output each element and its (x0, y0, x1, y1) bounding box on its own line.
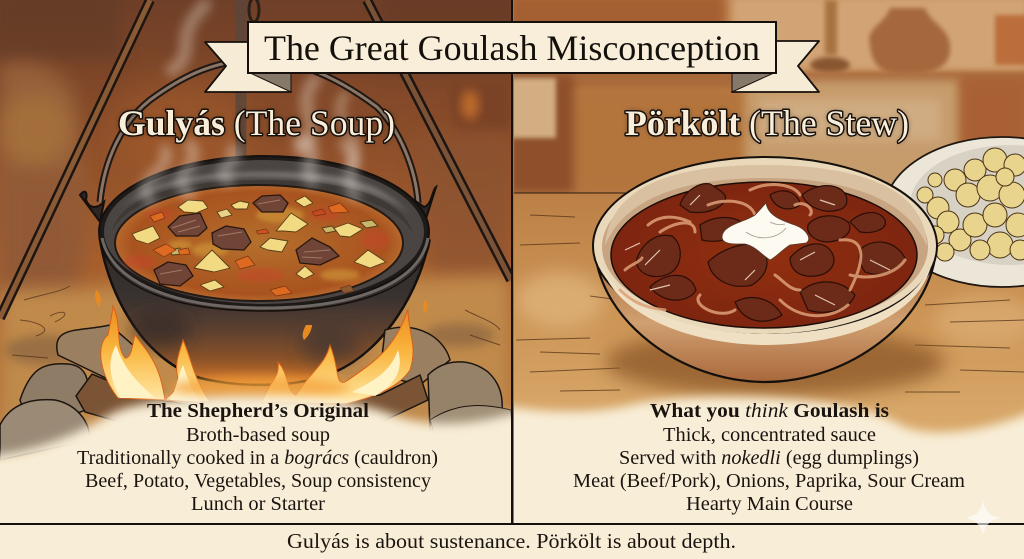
steam over pot (145, 140, 355, 200)
wooden table (514, 193, 1024, 443)
heading: Pörkölt: Pörkölt (The Stew) (625, 103, 909, 143)
sour cream (722, 203, 809, 260)
stones and logs (0, 325, 511, 460)
stew sauce (611, 182, 917, 328)
text block: What you think Goulash is: Served with nokedli (egg dumplings) (619, 447, 919, 469)
carrots (150, 203, 354, 296)
text block: What you think Goulash is: Hearty Main Course (686, 493, 853, 515)
beef chunks (154, 195, 339, 286)
plate of nokedli (884, 137, 1024, 287)
cauldron handle (100, 60, 418, 203)
potatoes (132, 196, 386, 291)
text block: What you think Goulash is: Meat (Beef/Pork), Onions, Paprika, Sour Cream (573, 470, 965, 492)
cauldron (80, 156, 436, 385)
text block: The Shepherd's Original: Beef, Potato, Vegetables, Soup consistency (85, 470, 431, 492)
text block: The Shepherd's Original: Broth-based soup (186, 424, 330, 446)
text block: What you think Goulash is: What you think Goulash is (650, 400, 889, 422)
text block: The Shepherd's Original: Traditionally cooked in a bogrács (cauldron) (77, 447, 438, 469)
text block: What you think Goulash is (573, 400, 965, 515)
cream fade behind text (0, 395, 530, 540)
footer rule (0, 523, 1024, 525)
soup (115, 185, 403, 301)
pot front rim (102, 238, 428, 308)
divider between panels (511, 0, 514, 523)
cream fade behind text (500, 397, 1024, 540)
text block: The Shepherd's Original: Lunch or Starter (191, 493, 325, 515)
heading: Pörkölt: Pörkölt (The Stew) (625, 103, 909, 143)
footer caption: Gulyás is about sustenance. Pörkölt is about depth. (287, 529, 736, 553)
text block: The Shepherd's Original (77, 400, 438, 515)
panel: Pörkölt (the stew) (514, 0, 1024, 440)
text block: What you think Goulash is: Thick, concentrated sauce (663, 424, 876, 446)
icon: sparkle (965, 500, 1001, 536)
panel: Gulyás (the soup) (0, 0, 511, 462)
tripod (0, 0, 511, 318)
title ribbon (205, 22, 819, 92)
heading: Gulyás: Gulyás (The Soup) (118, 103, 395, 143)
steam upper (172, 5, 355, 170)
blurred hearth background (0, 0, 511, 462)
title: The Great Goulash Misconception (264, 28, 760, 68)
bowl (593, 157, 937, 382)
heading: Gulyás: Gulyás (The Soup) (118, 103, 395, 143)
blurred kitchen background (514, 0, 1024, 193)
flames (95, 290, 428, 404)
text block: The Shepherd's Original: The Shepherd’s Original (147, 400, 369, 422)
